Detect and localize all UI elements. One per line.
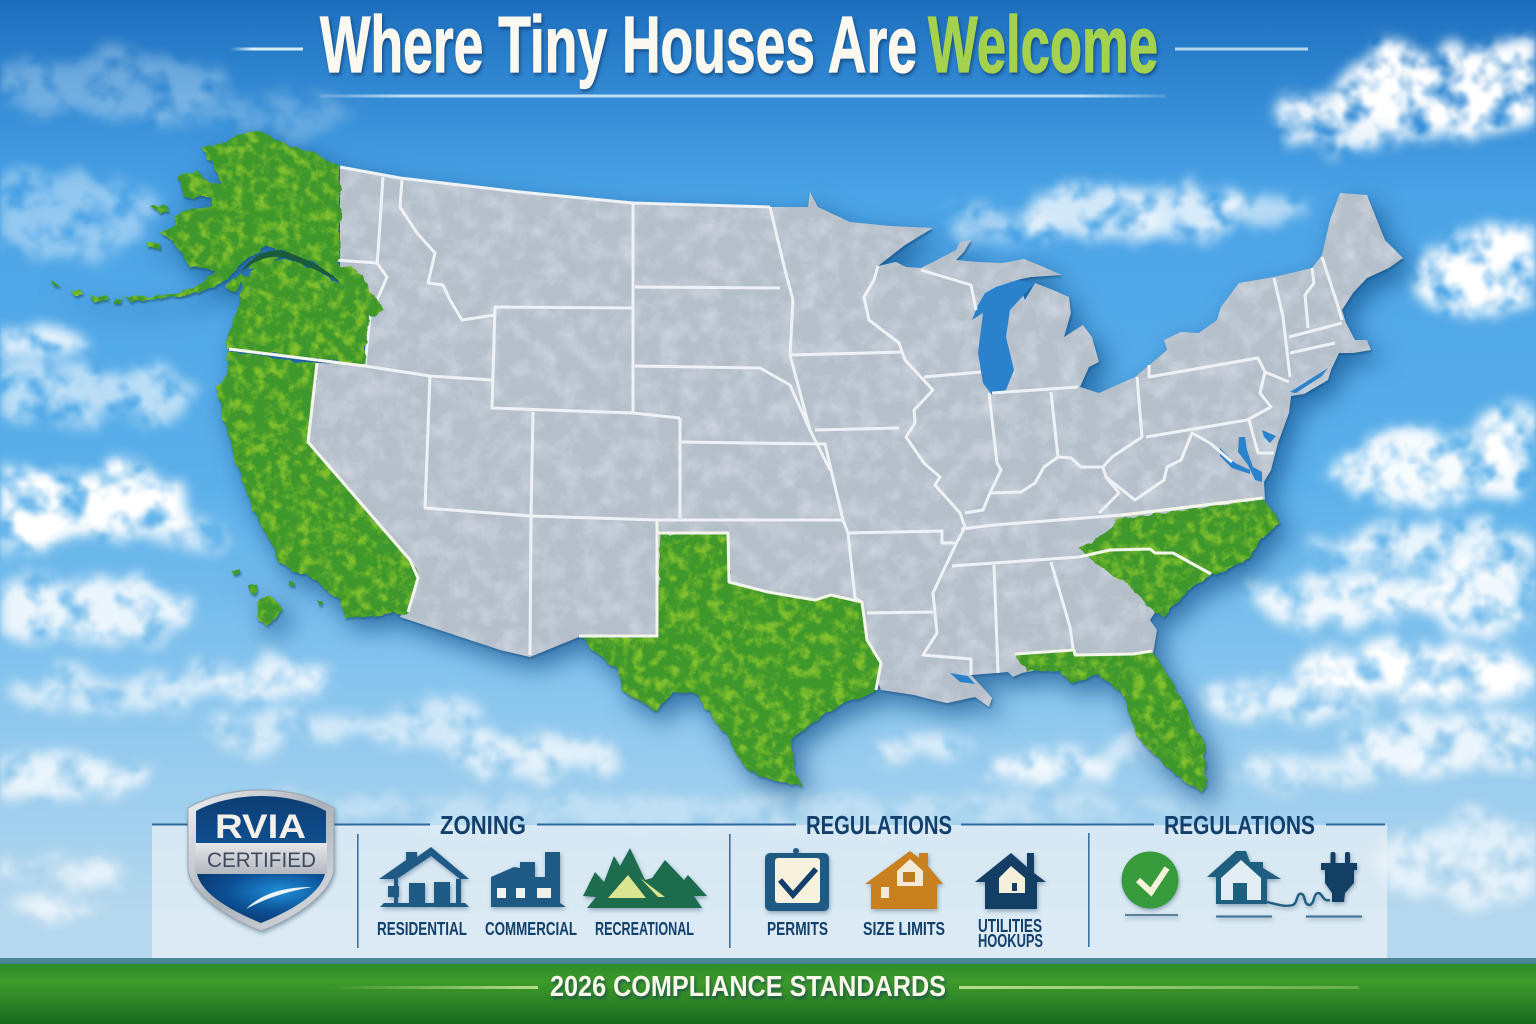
rvia certified shield badge (188, 790, 334, 931)
icon: power plug and cord (1267, 852, 1362, 918)
heading: regulations: REGULATIONS (806, 810, 952, 840)
state borders (229, 167, 1342, 675)
label: utilities hookups: HOOKUPS (978, 931, 1043, 951)
icon: size limits house (865, 851, 943, 909)
alaska coast dark inlet (240, 250, 340, 282)
green states (50, 130, 1280, 793)
label: residential: RESIDENTIAL (377, 919, 467, 939)
us map (50, 130, 1403, 793)
label: size limits: SIZE LIMITS (863, 919, 945, 939)
gray states landmass (308, 167, 1403, 707)
heading rules (152, 824, 1385, 826)
footer right rule (959, 986, 1359, 989)
alaska (120, 130, 384, 318)
lake michigan and bays (950, 280, 1328, 684)
kenai and kodiak islands (225, 252, 280, 292)
icon: permits clipboard (765, 848, 829, 911)
shield top panel (196, 796, 326, 843)
certified wordmark: CERTIFIED (207, 849, 316, 872)
california (217, 351, 418, 617)
heading: zoning: ZONING (440, 810, 526, 840)
grass (0, 964, 1536, 1024)
florida (1015, 650, 1206, 793)
green state borders (229, 349, 1263, 690)
north and south carolina (1079, 499, 1280, 617)
icon: house with utility line (1207, 851, 1281, 918)
heading: regulations second: REGULATIONS (1164, 810, 1315, 840)
icon: utilities house (975, 853, 1046, 909)
icon: residential house (379, 847, 469, 907)
rvia wordmark: RVIA (215, 808, 306, 846)
label: recreational: RECREATIONAL (595, 919, 694, 939)
footer left rule (330, 986, 538, 989)
panel background (152, 825, 1387, 958)
footer banner (330, 971, 1359, 1003)
swoosh (246, 887, 312, 909)
label: permits: PERMITS (767, 919, 828, 939)
label: utilities hookups: UTILITIES (978, 916, 1042, 936)
footer text: 2026 COMPLIANCE STANDARDS (550, 971, 946, 1003)
shield lower panel (197, 874, 325, 923)
hawaii islands (232, 570, 322, 626)
icon: green check circle (1122, 852, 1178, 916)
title text: white part: Where Tiny Houses Are (320, 0, 917, 89)
icon: commercial building (491, 852, 566, 907)
texas (579, 533, 881, 787)
title underline (320, 94, 1166, 98)
aleutian islands (50, 206, 170, 305)
divider lines (357, 833, 1090, 948)
compliance panel (152, 810, 1387, 958)
silver band (195, 843, 327, 874)
title left rule (230, 48, 303, 50)
label: utilities hookups (978, 916, 1043, 951)
title right rule (1175, 48, 1308, 50)
ground strip (0, 958, 1536, 1024)
oregon (227, 260, 368, 365)
icon: recreational trees and tent (583, 848, 707, 908)
shield frame (188, 790, 334, 931)
title (320, 0, 1158, 89)
horizon band (0, 958, 1536, 966)
label: commercial: COMMERCIAL (485, 919, 577, 939)
title text: green part: Welcome (928, 0, 1158, 89)
